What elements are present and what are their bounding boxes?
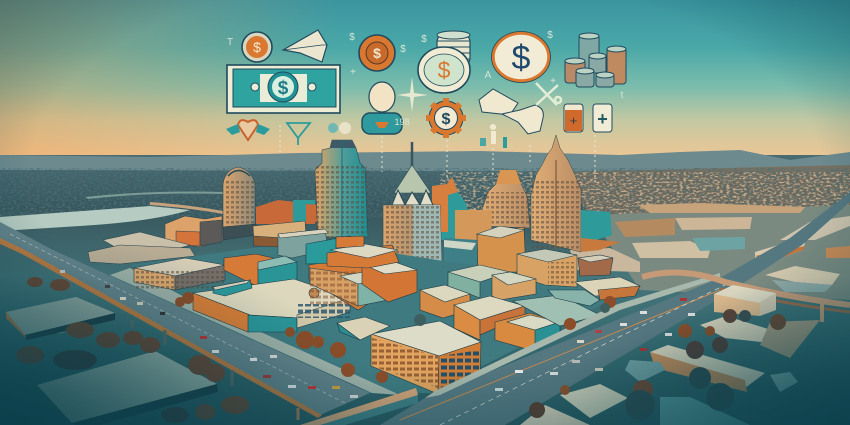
orange teal tower behind spire [432, 177, 467, 240]
icon group: finance symbols [226, 30, 626, 182]
river with bridges [0, 192, 223, 231]
icon: gear with dollar [426, 98, 466, 138]
teal block right of tower [581, 210, 620, 252]
icon: hand with envelope [479, 89, 543, 134]
small pale doodles: + [350, 67, 356, 78]
small pale doodles: t [621, 90, 624, 101]
icon: heart with wings [226, 120, 270, 140]
tall teal glass tower [315, 140, 368, 237]
city and right trees [175, 292, 786, 420]
small pale doodles [227, 30, 624, 101]
icon: bubbles [328, 122, 351, 134]
teal and tan roofs [448, 265, 536, 300]
icon: bottle cross: + [597, 109, 608, 129]
bottom-left warehouses [6, 297, 218, 425]
left highway [0, 222, 370, 420]
beige block [444, 210, 492, 268]
left tower [223, 167, 255, 227]
icon: stack of coins behind big coin [437, 31, 470, 66]
dashed connectors [280, 125, 595, 182]
stepped tower [482, 170, 530, 228]
orange and teal mid block [256, 200, 320, 224]
icon: small orange coin [242, 32, 272, 62]
sky background [0, 0, 850, 160]
left trees [16, 277, 249, 423]
distant towers [223, 135, 620, 268]
icon: striped coin [418, 47, 470, 93]
cars on left highway [60, 270, 358, 398]
right overpass [642, 273, 850, 322]
icon: scissors cross [536, 83, 561, 105]
main road right [380, 192, 850, 425]
icon: small orange coin: $ [253, 39, 261, 55]
icon: banknote: $ [278, 78, 289, 99]
central city blocks [134, 226, 640, 394]
icon: big dollar coin [492, 32, 550, 82]
teal and tan office [309, 258, 388, 310]
icon: sparkle [397, 77, 428, 112]
small pale doodles: T [227, 37, 233, 48]
parking garage left [134, 258, 225, 290]
icon: bottle cross [593, 104, 612, 132]
icon: paper plane [283, 30, 327, 62]
icon: striped coin: $ [438, 57, 451, 83]
icon: small people [480, 124, 507, 148]
small pale doodles: A [485, 70, 492, 81]
teal block centre [306, 236, 399, 268]
small pale doodles: $ [349, 32, 355, 43]
small pale doodles: $ [547, 30, 553, 41]
large foreground orange and teal building [193, 279, 350, 332]
left low buildings behind highway [88, 216, 328, 264]
ornate tall right tower [531, 135, 581, 252]
small teal building [337, 317, 390, 340]
tan corner blocks [477, 226, 526, 272]
city block ground [130, 240, 640, 393]
overpass ramp [300, 388, 418, 425]
cars on main road [495, 298, 695, 391]
icon: coin piles [565, 33, 626, 87]
right mid-distance low buildings [570, 203, 850, 300]
icon: orange ring coin: $ [373, 45, 381, 61]
orange block [362, 262, 417, 302]
icon: banknote [227, 65, 340, 113]
small pale doodles: + [550, 76, 556, 87]
front orange building [371, 321, 481, 394]
right warehouses [520, 285, 820, 425]
icon: orange ring coin [359, 35, 395, 71]
icon: person [362, 82, 402, 134]
icon: gear with dollar: $ [442, 111, 451, 128]
sidewalk strip beside left highway [110, 268, 400, 395]
small pale doodles: $ [400, 44, 406, 55]
icon: bottle orange: + [570, 113, 577, 128]
icon: bottle orange [564, 104, 583, 132]
icon: funnel [287, 123, 310, 145]
icon: big dollar coin: $ [512, 39, 531, 77]
orange teal block [224, 254, 297, 287]
ground and distant landscape [0, 150, 850, 425]
spire tower with windows [383, 142, 442, 273]
small pale doodles: $ [421, 34, 427, 45]
label: 198: 198 [394, 117, 410, 127]
